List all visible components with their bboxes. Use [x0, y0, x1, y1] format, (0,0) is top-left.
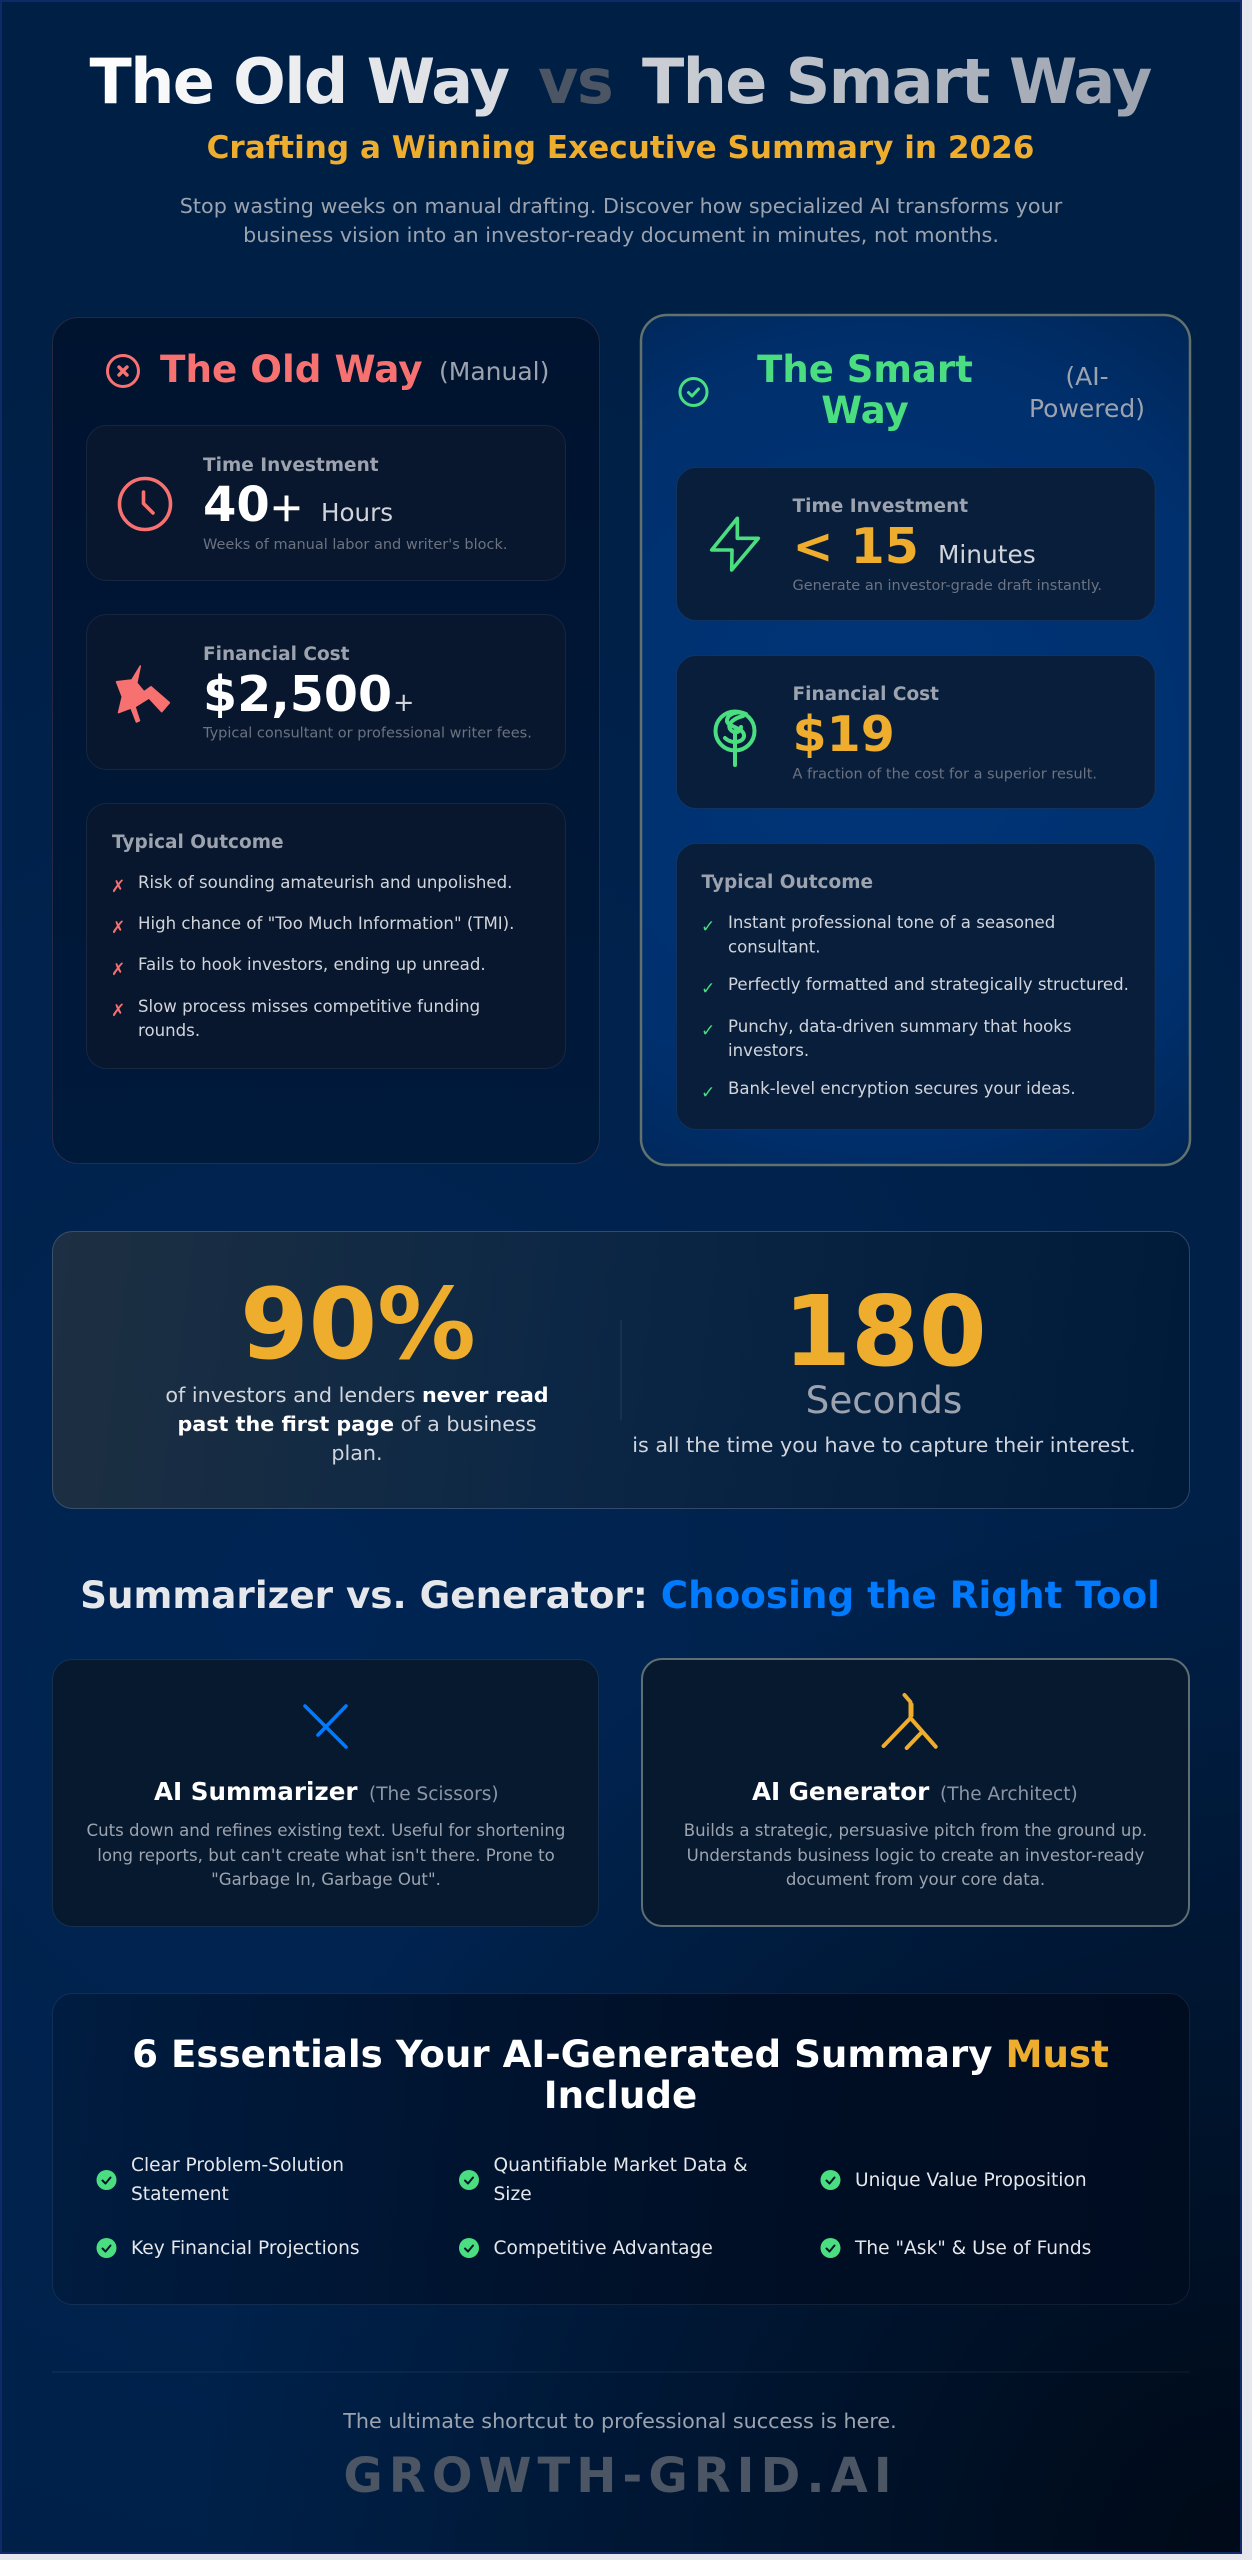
card: financial cost [86, 614, 566, 770]
icon: x circle [108, 356, 138, 386]
list: positive outcomes: Perfectly formatted and strategically structured. [728, 975, 1129, 994]
heading suffix: ai-powered: (AI- [1065, 362, 1109, 391]
stat: 180 seconds: 180 [783, 1274, 987, 1388]
card: time investment: Hours [321, 498, 393, 527]
card: financial cost: Financial Cost [792, 684, 939, 705]
list: negative outcomes: rounds. [138, 1021, 200, 1040]
icon: lightning bolt [712, 518, 758, 570]
heading: 6 essentials: 6 Essentials Your AI-Generated Summary Must [132, 2032, 1109, 2076]
stat: 90%: plan. [331, 1441, 383, 1465]
card: time investment: Weeks of manual labor and writer's block. [203, 537, 508, 553]
card body: Understands business logic to create an investor-ready [687, 1846, 1145, 1865]
list: positive outcomes: Instant professional tone of a seasoned [728, 913, 1055, 932]
icon: dollar circle [716, 712, 754, 765]
card: ai generator: (The Architect) [940, 1784, 1078, 1805]
item: quantifiable market data: Size [494, 2184, 532, 2205]
list: negative outcomes: ✗ [111, 1001, 125, 1021]
card body: document from your core data. [786, 1870, 1045, 1889]
heading: the old way: The Old Way [160, 347, 423, 391]
icon: architect [884, 1695, 936, 1748]
list: negative outcomes [111, 873, 514, 1040]
value: $19: $19 [792, 706, 895, 763]
item: clear problem-solution statement [96, 2155, 344, 2205]
heading suffix: ai-powered: Powered) [1029, 394, 1145, 423]
title [90, 45, 1152, 118]
stat: 90%: of investors and lenders never read [165, 1383, 549, 1407]
list: positive outcomes: ✓ [701, 1083, 715, 1103]
heading: the smart way: The Smart [757, 348, 973, 391]
item: the ask and use of funds: The "Ask" & Use of Funds [854, 2238, 1091, 2259]
heading: the smart way: Way [821, 389, 909, 432]
card: typical outcome [676, 844, 1155, 1130]
item: clear problem-solution statement: Statement [131, 2184, 229, 2205]
card: time investment [676, 468, 1155, 620]
heading: 6 essentials: Include [544, 2073, 697, 2117]
list: positive outcomes: investors. [728, 1041, 809, 1060]
card: financial cost: + [393, 688, 414, 718]
card heading: AI Summarizer [154, 1777, 358, 1806]
card: typical outcome [86, 804, 566, 1068]
card: typical outcome: Typical Outcome [702, 872, 873, 893]
stat: 180 seconds [632, 1274, 1136, 1457]
intro paragraph: Stop wasting weeks on manual drafting. Discover how specialized AI transforms your [180, 194, 1063, 218]
list: negative outcomes: Fails to hook investors, ending up unread. [138, 955, 486, 974]
subtitle: Crafting a Winning Executive Summary in 2026 [207, 130, 1034, 166]
card: time investment: Generate an investor-grade draft instantly. [792, 578, 1102, 594]
icon: money [116, 666, 169, 722]
icon: scissors [305, 1706, 346, 1747]
panel: the old way [52, 318, 600, 1164]
list: positive outcomes: consultant. [728, 938, 821, 957]
heading: the smart way [757, 348, 973, 432]
icon: check circle [680, 378, 707, 406]
item: clear problem-solution statement: Clear Problem-Solution [131, 2155, 344, 2176]
value: < 15 minutes: < 15 [792, 518, 919, 575]
card: ai summarizer: (The Scissors) [369, 1784, 499, 1805]
item: unique value proposition: Unique Value Proposition [855, 2170, 1087, 2191]
title: The Smart Way [642, 45, 1152, 118]
card: ai generator [642, 1659, 1189, 1926]
stat: 90%: 90% [240, 1268, 476, 1382]
list: positive outcomes: ✓ [701, 917, 715, 937]
heading: 6 essentials [132, 2032, 1109, 2117]
intro paragraph [180, 194, 1063, 247]
title: The Old Way [90, 45, 510, 118]
list: negative outcomes: ✗ [111, 877, 125, 897]
footer tagline: The ultimate shortcut to professional success is here. [342, 2409, 897, 2433]
list: positive outcomes [701, 913, 1129, 1103]
card heading: AI Generator [752, 1777, 930, 1806]
stat: 180 seconds: Seconds [806, 1378, 962, 1422]
list: positive outcomes: Bank-level encryption secures your ideas. [728, 1079, 1076, 1098]
item: key financial projections: Key Financial Projections [131, 2238, 360, 2259]
list: negative outcomes: High chance of "Too Much Information" (TMI). [138, 914, 514, 933]
footer brand: GROWTH-GRID.AI [343, 2448, 898, 2504]
card: time investment: Time Investment [203, 455, 379, 476]
list: positive outcomes: ✓ [701, 1021, 715, 1041]
intro paragraph: business vision into an investor-ready document in minutes, not months. [243, 223, 999, 247]
stat: 90% [165, 1268, 549, 1465]
item: quantifiable market data: Quantifiable Market Data & [494, 2155, 748, 2176]
heading suffix: ai-powered [1029, 362, 1145, 423]
card: time investment: Time Investment [792, 496, 968, 517]
panel: 6 essentials [52, 1994, 1190, 2304]
panel: statistics [52, 1232, 1190, 1508]
card body: Cuts down and refines existing text. Useful for shortening [87, 1821, 565, 1840]
item: quantifiable market data [459, 2155, 748, 2205]
footer [342, 2409, 898, 2504]
card: financial cost: Typical consultant or professional writer fees. [202, 726, 532, 742]
card: financial cost: Financial Cost [203, 644, 350, 665]
list: negative outcomes: Risk of sounding amateurish and unpolished. [138, 873, 512, 892]
list: positive outcomes: ✓ [701, 979, 715, 999]
panel: the smart way [641, 315, 1190, 1165]
header [90, 45, 1152, 247]
value: 40+ hours: 40+ [203, 477, 303, 533]
card: time investment: Minutes [938, 540, 1036, 569]
card: typical outcome: Typical Outcome [112, 832, 284, 853]
stat: 180 seconds: is all the time you have to capture their interest. [632, 1433, 1136, 1457]
card: financial cost: A fraction of the cost for a superior result. [792, 766, 1097, 782]
icon: clock [120, 478, 170, 530]
list: negative outcomes: ✗ [111, 960, 125, 980]
heading suffix: manual: (Manual) [439, 357, 549, 386]
title: vs [538, 45, 612, 118]
card body [87, 1821, 565, 1889]
card body: Builds a strategic, persuasive pitch from the ground up. [684, 1821, 1147, 1840]
list: positive outcomes: Punchy, data-driven summary that hooks [728, 1017, 1072, 1036]
list: negative outcomes: Slow process misses competitive funding [138, 997, 480, 1016]
card: time investment [86, 426, 566, 580]
section heading: summarizer vs generator: Summarizer vs. Generator: Choosing the Right Tool [80, 1573, 1160, 1617]
list: negative outcomes: ✗ [111, 918, 125, 938]
card body [684, 1821, 1147, 1889]
card body: "Garbage In, Garbage Out". [211, 1870, 441, 1889]
stat: 90%: past the first page of a business [177, 1412, 537, 1436]
card: ai summarizer [52, 1660, 598, 1926]
item: competitive advantage: Competitive Advantage [494, 2238, 713, 2259]
card: financial cost [676, 656, 1155, 808]
card body: long reports, but can't create what isn't there. Prone to [97, 1846, 555, 1865]
value: $2,500+: $2,500 [203, 666, 392, 723]
